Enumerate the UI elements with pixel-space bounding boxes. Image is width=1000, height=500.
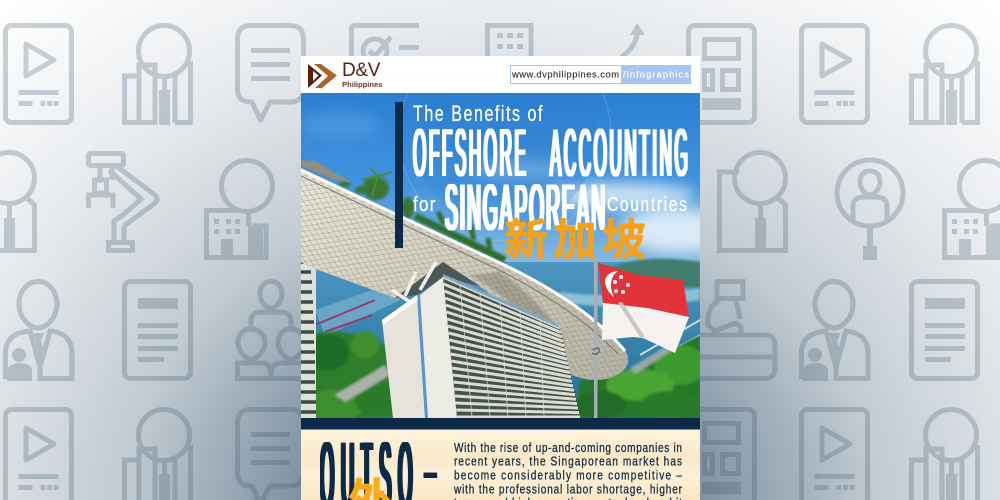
logo wordmark: D&V — [342, 60, 380, 81]
navy divider band — [301, 418, 700, 430]
text line 4: with the professional labor shortage, higher — [453, 484, 682, 497]
title line: Singaporean: SINGAPOREAN — [445, 170, 607, 244]
sky — [301, 93, 700, 262]
section heading: OUTSO- — [320, 430, 438, 500]
panel: infographic poster — [301, 56, 700, 500]
logo wordmark: Philippines — [342, 80, 383, 89]
hero image: Marina Bay Sands and Singapore flag — [301, 93, 700, 418]
title — [412, 101, 690, 244]
left tower — [301, 254, 316, 418]
website url box: www.dvphilippines.com — [511, 68, 619, 80]
icon: logo arrows — [308, 64, 337, 88]
accent bar beside title — [395, 102, 403, 248]
logo: D&V Philippines — [308, 60, 383, 89]
chinese heading: Singapore: 新加坡 — [504, 216, 651, 265]
title line: Offshore Accounting: OFFSHORE ACCOUNTING — [413, 115, 690, 191]
title line: Countries: Countries — [607, 194, 689, 216]
hotel tower — [382, 274, 580, 418]
text line 1: With the rise of up-and-coming companies in — [454, 442, 682, 455]
text line 3: become considerably more competitive – — [454, 470, 683, 483]
title line: for: for — [413, 194, 437, 216]
rooftop greenery — [339, 168, 505, 260]
trees — [305, 331, 706, 421]
singapore flag — [592, 256, 689, 418]
title line: The Benefits of: The Benefits of — [413, 101, 544, 126]
panel: outsourcing intro — [301, 430, 700, 500]
logo wordmark — [342, 60, 383, 89]
bay and distant shore — [301, 259, 700, 422]
header bar — [308, 60, 383, 89]
skypark roof — [301, 160, 628, 380]
text line 2: recent years, the Singaporean market has — [454, 456, 682, 469]
website url box: /infographics — [623, 68, 689, 80]
